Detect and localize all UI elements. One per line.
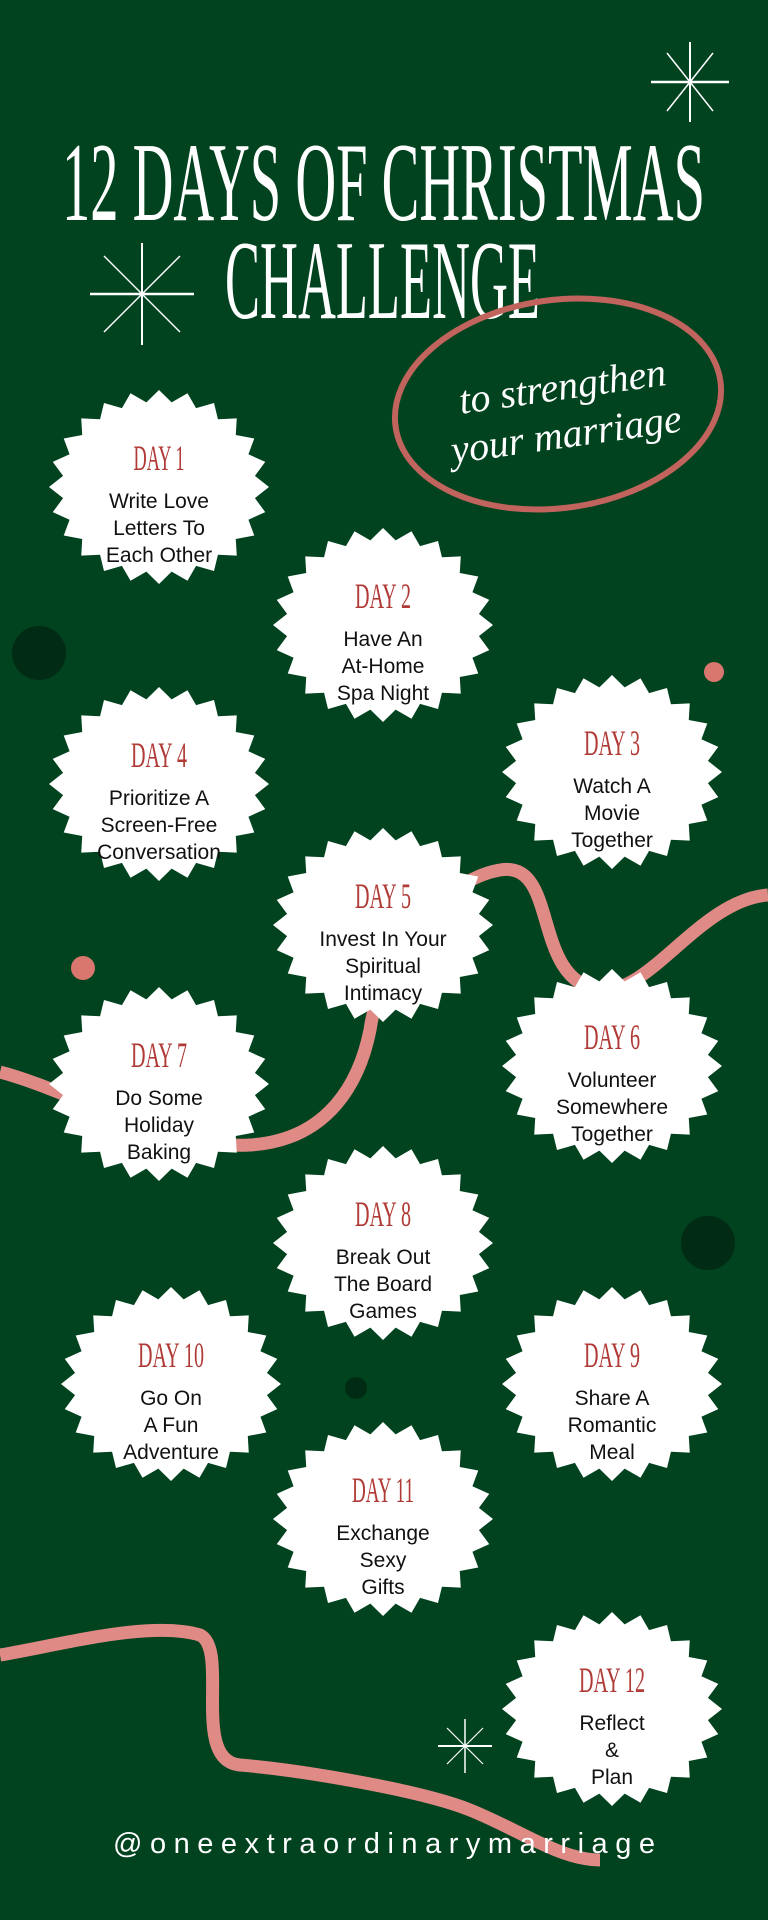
badge: day 2: DAY 2	[355, 576, 411, 616]
badge: day 8: DAY 8	[355, 1194, 411, 1234]
badge: day 7: Do Some	[115, 1087, 203, 1110]
badge: day 5: Spiritual	[345, 955, 421, 978]
badge: day 1	[49, 390, 269, 584]
badge: day 1: Write Love	[109, 490, 209, 513]
badge: day 5: Invest In Your	[319, 928, 447, 951]
badge: day 9: Romantic	[568, 1414, 656, 1437]
badge: day 6	[502, 969, 722, 1163]
badge: day 5	[273, 828, 493, 1022]
badge: day 10: A Fun	[144, 1414, 198, 1437]
title	[62, 121, 705, 343]
subtitle callout: ellipse with script text: to strengthen	[456, 349, 669, 423]
badge: day 9: Share A	[575, 1387, 649, 1410]
icon: sparkle top right	[651, 42, 729, 122]
badge: day 10: Adventure	[123, 1441, 219, 1464]
badge: day 5: DAY 5	[355, 876, 411, 916]
badge: day 6: DAY 6	[584, 1017, 640, 1057]
badge: day 2: Have An	[343, 628, 423, 651]
badge: day 2: Spa Night	[337, 682, 429, 705]
badge: day 9: Meal	[589, 1441, 635, 1464]
badge: day 11: Exchange	[336, 1522, 430, 1545]
subtitle callout: ellipse with script text: your marriage	[444, 395, 684, 473]
badge: day 7: DAY 7	[131, 1035, 187, 1075]
badge: day 8	[273, 1146, 493, 1340]
badge: day 7: Baking	[127, 1141, 191, 1164]
badge: day 12	[502, 1612, 722, 1806]
badge: day 4: DAY 4	[131, 735, 187, 775]
badge: day 11	[273, 1422, 493, 1616]
badge: day 9	[502, 1287, 722, 1481]
icon: sparkle small bottom	[438, 1719, 492, 1773]
badge: day 4: Screen-Free	[101, 814, 217, 837]
badge: day 2: At-Home	[342, 655, 424, 678]
badge: day 12: DAY 12	[579, 1660, 645, 1700]
badge: day 2	[273, 528, 493, 722]
badge: day 11: Sexy	[360, 1549, 407, 1572]
badge: day 8: Break Out	[336, 1246, 430, 1269]
badge: day 10: DAY 10	[138, 1335, 204, 1375]
badge: day 1: DAY 1	[134, 438, 184, 478]
badge: day 7	[49, 987, 269, 1181]
icon: sparkle left	[90, 243, 194, 345]
badge: day 1: Each Other	[106, 544, 212, 567]
badge: day 8: The Board	[334, 1273, 432, 1296]
badge: day 10: Go On	[140, 1387, 202, 1410]
badge: day 4: Conversation	[97, 841, 221, 864]
badge: day 12: &	[605, 1739, 619, 1762]
badge: day 6: Together	[571, 1123, 653, 1146]
badge: day 3: Watch A	[573, 775, 651, 798]
badge: day 4	[49, 687, 269, 881]
badge: day 11: DAY 11	[352, 1470, 414, 1510]
badge: day 12: Plan	[591, 1766, 633, 1789]
badge: day 3	[502, 675, 722, 869]
decorative dots	[12, 626, 735, 1399]
badge: day 6: Somewhere	[556, 1096, 668, 1119]
badge: day 4: Prioritize A	[109, 787, 209, 810]
badge: day 11: Gifts	[361, 1576, 405, 1599]
badge: day 10	[61, 1287, 281, 1481]
badge: day 5: Intimacy	[344, 982, 423, 1005]
badge: day 6: Volunteer	[568, 1069, 656, 1092]
badge: day 9: DAY 9	[584, 1335, 640, 1375]
subtitle callout: ellipse with script text	[381, 278, 735, 530]
badge: day 8: Games	[349, 1300, 417, 1323]
badge: day 1: Letters To	[113, 517, 205, 540]
badge: day 3: DAY 3	[584, 723, 640, 763]
badge: day 7: Holiday	[124, 1114, 195, 1137]
ribbon: middle	[0, 869, 768, 1145]
footer handle: @oneextraordinarymarriage	[113, 1828, 655, 1860]
badge: day 3: Together	[571, 829, 653, 852]
badge: day 3: Movie	[584, 802, 640, 825]
badge: day 12: Reflect	[579, 1712, 645, 1735]
ribbon: bottom	[0, 1630, 600, 1860]
